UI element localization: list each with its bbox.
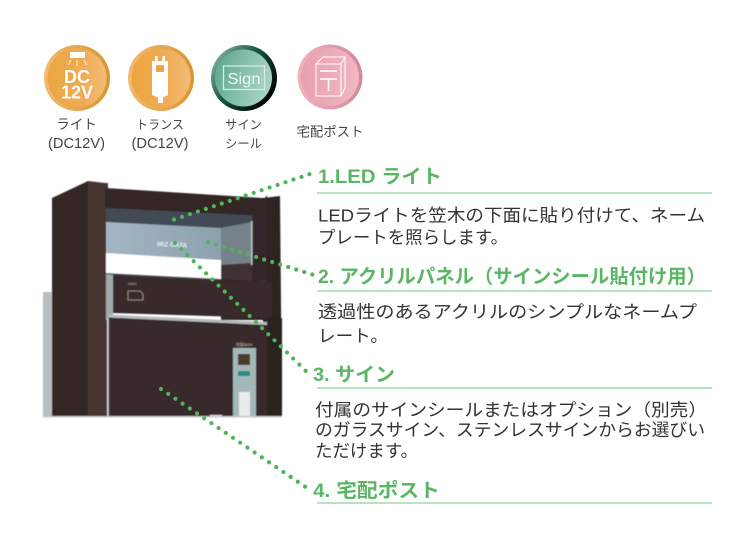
- pillar front: [88, 181, 105, 417]
- text block 3: 付属のサインシールまたはオプション（別売）: [315, 400, 707, 420]
- icon label: light: [48, 117, 105, 152]
- icon label: light: (DC12V): [48, 135, 105, 152]
- text block 3: のガラスサイン、ステンレスサインからお選びい: [315, 420, 705, 440]
- heading 2: 2. アクリルパネル（サインシール貼付け用）: [318, 266, 706, 288]
- icon label: sign seal: [225, 118, 262, 151]
- text block 3: [315, 400, 707, 461]
- text block 2: レート。: [318, 326, 388, 346]
- pillar side: [52, 181, 88, 417]
- leader line 2: [208, 242, 314, 275]
- top cap: [105, 188, 263, 216]
- text block 3: ただけます。: [315, 441, 418, 461]
- icon: sign seal: Sign: [228, 71, 260, 88]
- wall behind: [43, 292, 53, 417]
- icon label: transformer: [132, 118, 188, 152]
- text block 1: プレートを照らします。: [318, 228, 508, 248]
- product photo: post cabinet: [43, 181, 282, 418]
- mail panel: [106, 274, 113, 320]
- leader line 4: [161, 389, 310, 490]
- right pillar: [263, 196, 282, 417]
- leader line 1: [174, 174, 310, 220]
- product photo: post cabinet: MAIL: [128, 281, 138, 286]
- parcel sticker: [233, 348, 256, 417]
- heading 4: 4. 宅配ポスト: [313, 480, 440, 502]
- heading 3: 3. サイン: [313, 364, 395, 386]
- icon: transformer: [128, 45, 194, 111]
- icon label: light: ライト: [56, 117, 97, 132]
- icon: DC 12V light: 12V: [61, 82, 93, 102]
- icon label: sign seal: サイン: [225, 118, 262, 132]
- icon: sign seal: [211, 45, 277, 111]
- icon label: sign seal: シール: [225, 137, 262, 151]
- text block 1: [318, 206, 705, 248]
- heading 1: 1.LED ライト: [318, 166, 442, 188]
- door: [108, 317, 267, 417]
- acrylic panel: [106, 222, 221, 260]
- icon label: delivery box: 宅配ポスト: [297, 124, 363, 140]
- recess: [106, 205, 267, 285]
- icon: delivery box: [298, 44, 362, 110]
- text block 1: LEDライトを笠木の下面に貼り付けて、ネーム: [318, 206, 705, 226]
- leader line 3: [175, 243, 310, 375]
- icon: DC 12V light: DC: [64, 67, 90, 87]
- icon: DC 12V light: [44, 45, 110, 111]
- product photo: post cabinet: 宅配BOX: [236, 342, 253, 347]
- text block 2: [318, 302, 698, 346]
- text block 2: 透過性のあるアクリルのシンプルなネームプ: [318, 302, 698, 322]
- product photo: post cabinet: MIZ DATA: [157, 241, 188, 250]
- icon label: transformer: (DC12V): [132, 135, 188, 152]
- icon label: transformer: トランス: [136, 118, 184, 132]
